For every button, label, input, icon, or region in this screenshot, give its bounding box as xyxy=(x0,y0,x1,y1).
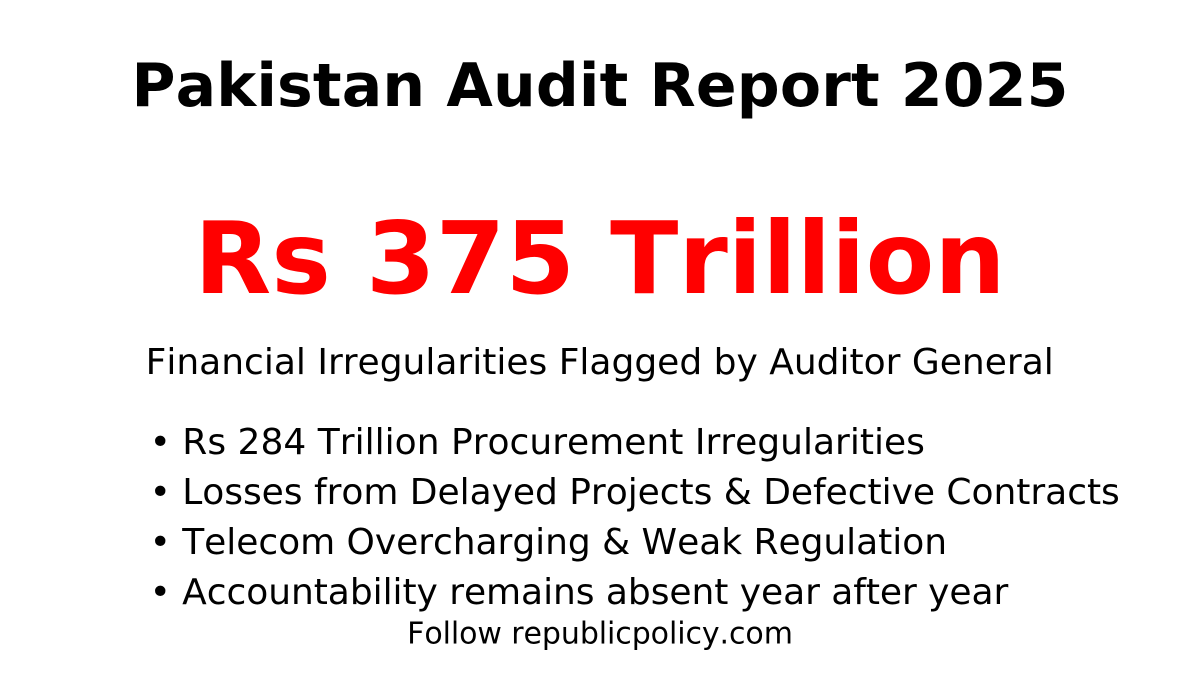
headline figure: Rs 375 Trillion xyxy=(194,200,1006,317)
bullet: telecom: • Telecom Overcharging & Weak Regulation xyxy=(150,522,947,563)
bullet list xyxy=(150,422,1120,613)
bullet: procurement: • Rs 284 Trillion Procurement Irregularities xyxy=(150,422,925,463)
title: Pakistan Audit Report 2025 xyxy=(131,51,1069,121)
bullet: losses: • Losses from Delayed Projects & Defective Contracts xyxy=(150,472,1120,513)
footer: Follow republicpolicy.com xyxy=(407,616,793,651)
bullet: accountability: • Accountability remains absent year after year xyxy=(150,572,1009,613)
subtitle: Financial Irregularities Flagged by Auditor General xyxy=(146,342,1054,383)
